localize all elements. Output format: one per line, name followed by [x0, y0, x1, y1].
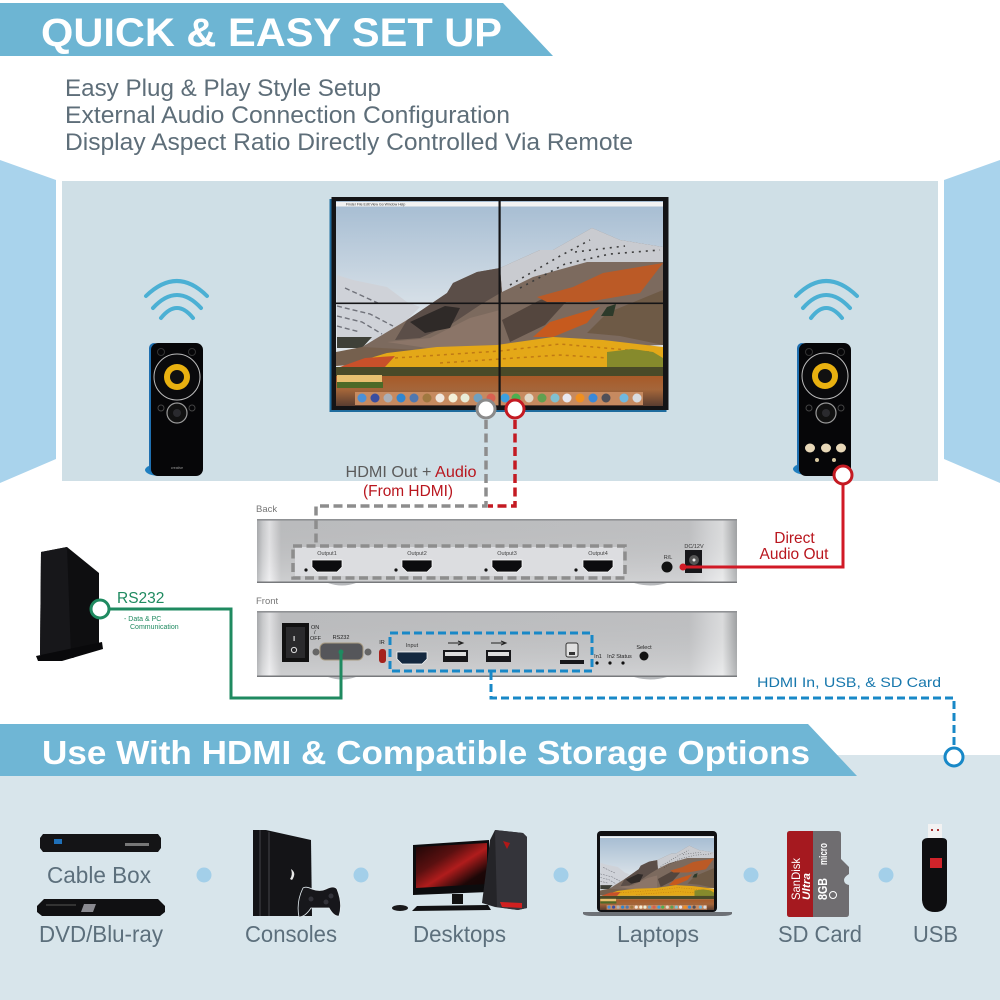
- usb label: USB: [913, 921, 958, 947]
- front device panel: ON: [311, 625, 319, 631]
- title banner: QUICK & EASY SET UP: [41, 11, 502, 55]
- icon: micro SD card: SanDisk: [789, 857, 803, 900]
- HDMI out and audio label: (From HDMI): [363, 483, 453, 500]
- RS232 green line: [91, 600, 344, 698]
- back device panel: Output4: [588, 551, 608, 557]
- left speaker: creative: [171, 466, 183, 470]
- consoles label: Consoles: [245, 921, 337, 947]
- section banner: [0, 724, 857, 776]
- front device panel: OFF: [310, 636, 322, 642]
- separator dot: [196, 868, 212, 882]
- icon: micro SD card: [787, 831, 849, 917]
- gray connector circle on display: [477, 400, 495, 418]
- separator dot: [354, 868, 368, 882]
- front device panel: Status: [616, 654, 632, 660]
- RS232 label: [117, 590, 179, 631]
- laptops label: Laptops: [617, 921, 699, 947]
- icon: game console: [253, 830, 341, 917]
- back label: Back: [256, 504, 277, 515]
- icon: USB flash drive: [922, 824, 947, 912]
- feature list text: External Audio Connection Configuration: [65, 102, 510, 129]
- HDMI out and audio label: HDMI Out + Audio: [346, 464, 476, 481]
- back device panel: Output3: [497, 551, 517, 557]
- direct audio out label: [760, 530, 829, 563]
- front device panel: [256, 596, 737, 680]
- left speaker: [145, 343, 203, 476]
- PC tower: [36, 547, 103, 661]
- direct audio out label: Direct: [774, 530, 815, 547]
- sd card label: SD Card: [778, 921, 862, 947]
- back device panel: Output1: [317, 551, 337, 557]
- blue dashed inputs box: [390, 633, 592, 671]
- blue connector circle: [945, 748, 963, 766]
- separator dot: [744, 868, 758, 882]
- separator dot: [554, 868, 568, 882]
- icon: micro SD card: micro: [818, 843, 830, 865]
- back device panel: DC/12V: [684, 544, 704, 550]
- icon: desktop computer: [392, 830, 527, 911]
- front device panel: Select: [636, 645, 652, 651]
- front device panel: In1: [594, 654, 602, 660]
- right speaker: [793, 343, 851, 476]
- video wall display: Finder File Edit View Go Window Help: [346, 202, 405, 206]
- right side wall: [944, 160, 1000, 483]
- RS232 label: RS232: [117, 590, 164, 607]
- direct audio out line: [680, 466, 852, 570]
- red dashed audio line: [488, 420, 515, 506]
- front device panel: /: [314, 630, 316, 636]
- gray dashed HDMI line: [316, 420, 486, 545]
- RS232 label: - Data & PC: [124, 616, 161, 623]
- video wall display: [330, 197, 668, 412]
- feature list text: Display Aspect Ratio Directly Controlled Via Remote: [65, 129, 633, 156]
- HDMI in label: HDMI In, USB, & SD Card: [757, 674, 941, 690]
- section banner: Use With HDMI & Compatible Storage Options: [42, 734, 810, 771]
- title banner: [0, 3, 553, 56]
- direct audio out label: Audio Out: [760, 546, 829, 563]
- dvd label: DVD/Blu-ray: [39, 921, 163, 947]
- icon: micro SD card: Ultra: [801, 873, 813, 900]
- icon: right wireless waves: [796, 281, 857, 318]
- left side wall: [0, 160, 56, 483]
- icon: left wireless waves: [146, 281, 207, 318]
- gray dashed outputs box: [293, 546, 625, 578]
- background wall: [62, 181, 938, 481]
- feature list text: Easy Plug & Play Style Setup: [65, 75, 381, 102]
- desktops label: Desktops: [413, 921, 506, 947]
- feature list text: [65, 75, 633, 156]
- front device panel: RS232: [333, 635, 349, 641]
- back device panel: R/L: [664, 555, 672, 561]
- bottom storage panel background: [0, 755, 1000, 1000]
- front device panel: IR: [379, 640, 385, 646]
- front device panel: Input: [406, 643, 419, 649]
- icon: laptop: [583, 831, 732, 916]
- HDMI out and audio label: [346, 464, 476, 500]
- red connector circle on display: [506, 400, 524, 418]
- RS232 label: Communication: [130, 624, 179, 631]
- blue dashed line: [491, 672, 954, 748]
- front device panel: In2: [607, 654, 615, 660]
- front label: Front: [256, 596, 279, 607]
- cable box label: Cable Box: [47, 862, 151, 888]
- back device panel: [256, 504, 737, 586]
- icon: micro SD card: 8GB: [815, 878, 830, 900]
- icon: cable box: [40, 834, 161, 852]
- back device panel: Output2: [407, 551, 427, 557]
- icon: dvd player: [37, 899, 165, 916]
- separator dot: [878, 868, 894, 882]
